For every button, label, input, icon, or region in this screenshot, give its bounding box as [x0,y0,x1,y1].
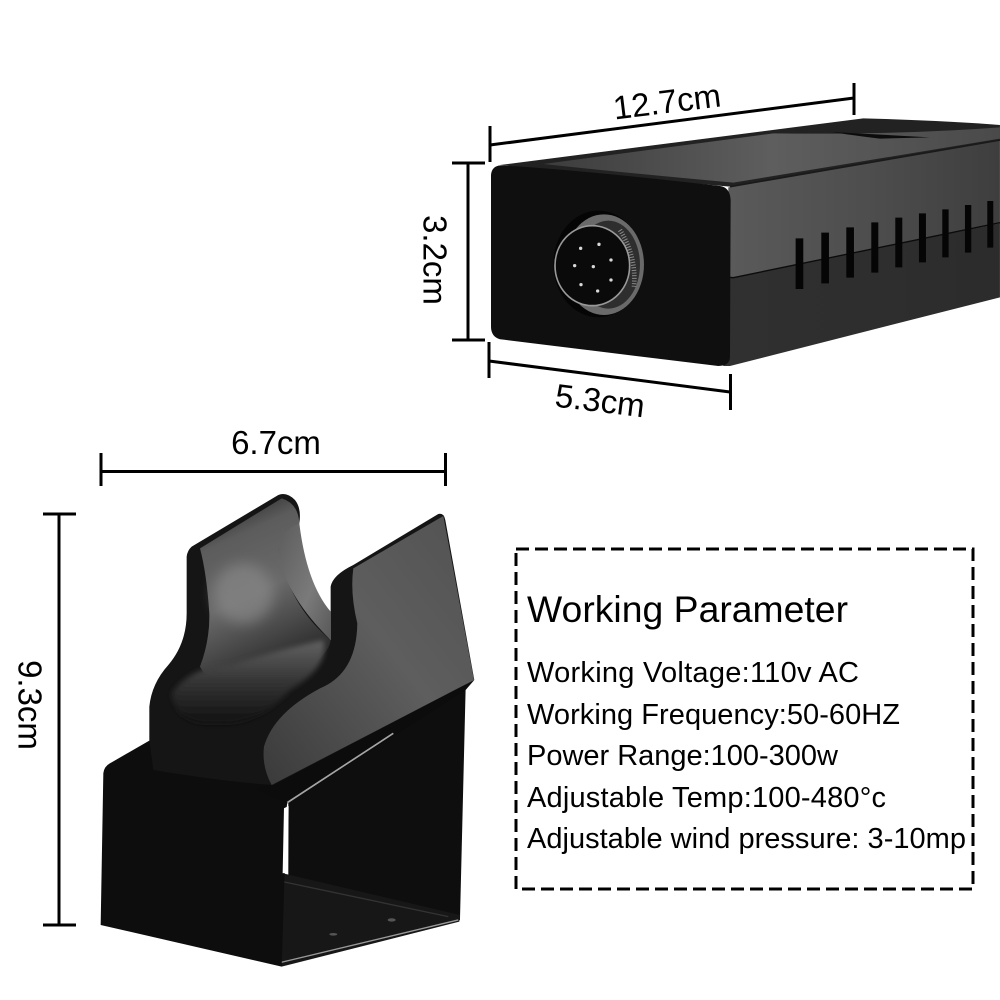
box front face [491,165,731,366]
stand bottom edge highlight [280,920,458,963]
connector threaded highlights [620,230,634,287]
holder top ridge [200,498,331,697]
stand front wall [101,741,290,967]
dimension: 9.3cm [12,514,76,925]
box side face lower [723,223,1000,366]
spec: voltage: Working Voltage:110v AC [527,657,859,689]
dimension: 12.7cm [490,77,854,162]
box side face upper [728,140,1000,278]
holder lower lobe [172,640,324,724]
connector metal barrel [564,214,644,315]
dimension: 6.7cm: 6.7cm [231,424,321,461]
spec: power: Power Range:100-300w [527,740,839,772]
connector [553,211,644,317]
dimension: 5.3cm: 5.3cm [553,377,647,424]
box top face [500,118,1000,187]
dimension: 12.7cm: 12.7cm [611,77,723,126]
panel: working parameter [516,549,973,889]
box top slot [832,132,930,139]
holder right plate [264,516,474,785]
holder underside shadow [257,680,474,803]
dimension: 6.7cm [101,424,446,486]
product photo: power box [491,118,1000,366]
dimension: 3.2cm [416,163,485,340]
holder silhouette [149,494,474,785]
dimension: 5.3cm [489,342,730,424]
holder soft highlights [213,563,273,623]
spec: wind pressure: Adjustable wind pressure: 3-10mp [527,823,966,855]
stand inner back wall [288,688,466,921]
product photo: holder stand [101,494,474,967]
dimension: 3.2cm: 3.2cm [416,215,454,305]
heading: Working Parameter [527,588,848,630]
stand mounting holes [329,918,396,936]
spec: temperature: Adjustable Temp:100-480°c [527,782,886,814]
stand edge highlight [287,733,393,803]
stand back rail line [283,882,448,917]
connector shadow [553,211,643,317]
box top inner panel [543,127,1000,183]
dashed border [516,549,973,889]
connector pins [573,243,613,293]
dimension: 9.3cm: 9.3cm [12,660,48,750]
box side vent slots [796,201,993,289]
box seam line [693,223,1000,278]
holder groove [278,523,331,640]
connector face [555,226,630,306]
box top edge shadow [730,140,1000,187]
spec: frequency: Working Frequency:50-60HZ [527,699,900,731]
stand bottom plate [277,873,460,967]
stand gap [283,806,289,873]
